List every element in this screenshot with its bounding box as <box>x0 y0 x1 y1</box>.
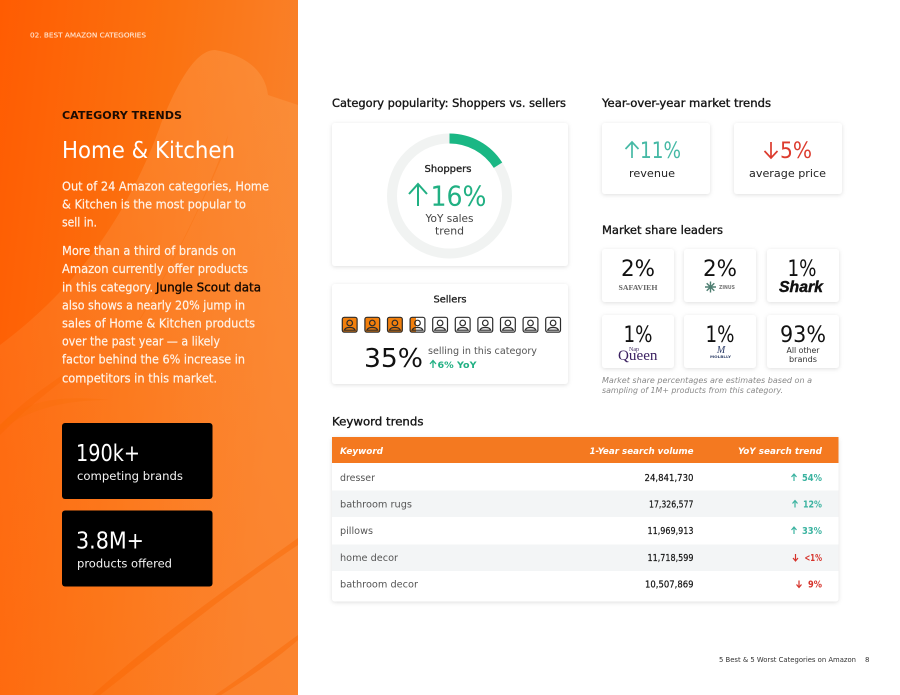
card: Zinus: ZINUS <box>719 285 735 291</box>
footnote: Market share percentages are estimates based on a <box>602 376 812 385</box>
card: all other brands <box>767 315 839 368</box>
text block: analysis: More than a third of brands on <box>62 244 236 258</box>
icon row: sellers pictogram <box>342 317 560 332</box>
row: bathroom rugs: 12% <box>803 500 822 510</box>
card: Molblly: 1% <box>706 323 734 348</box>
panel: orange sidebar <box>0 0 298 695</box>
card: Molblly <box>684 315 756 368</box>
panel: sellers: selling in this category <box>428 346 537 357</box>
stat card: competing brands: 190k+ <box>76 441 140 467</box>
text block: intro <box>62 180 269 230</box>
card: Safavieh: 2% <box>621 257 655 282</box>
stat card: products offered: products offered <box>77 556 172 570</box>
row: dresser: dresser <box>340 473 376 484</box>
icon: up arrow <box>409 184 427 206</box>
row: bathroom decor: 9% <box>808 580 822 590</box>
card: Zinus: 2% <box>703 257 737 282</box>
card: Molblly: M <box>716 345 726 356</box>
card: Nap Queen: Queen <box>618 348 658 364</box>
heading: market share: Market share leaders <box>602 223 723 237</box>
card: revenue: 11% <box>640 139 681 164</box>
card: Safavieh: SAFAVIEH <box>618 283 658 292</box>
icon: small up arrow <box>430 360 436 368</box>
text block: analysis <box>62 244 261 386</box>
heading: keyword trends: Keyword trends <box>332 414 424 428</box>
text block: analysis: Jungle Scout data <box>155 280 261 294</box>
panel: sellers: Sellers <box>434 294 467 306</box>
card: Zinus <box>684 249 756 302</box>
table: keyword trends <box>332 437 838 602</box>
row: home decor: home decor <box>340 553 399 564</box>
row: bathroom decor <box>340 580 822 590</box>
card: revenue <box>602 123 710 194</box>
row: home decor <box>340 553 822 564</box>
panel: shoppers donut <box>332 123 568 266</box>
card: Shark: 1% <box>788 257 816 282</box>
text block: analysis: over the past year — a likely <box>62 334 220 348</box>
title: Home & Kitchen <box>62 138 235 164</box>
stat card: products offered <box>62 510 212 586</box>
card: Safavieh <box>602 249 674 302</box>
text block: analysis: competitors in this market. <box>62 372 217 386</box>
eyebrow heading: CATEGORY TRENDS <box>62 110 182 122</box>
text block: analysis: sales of Home & Kitchen products <box>62 316 255 330</box>
table header: YoY search trend <box>738 447 823 457</box>
row: home decor: <1% <box>804 553 822 564</box>
footer: 5 Best & 5 Worst Categories on Amazon <box>719 656 856 664</box>
text block: intro: & Kitchen is the most popular to <box>62 198 246 212</box>
panel: sellers: 6% YoY <box>438 361 477 371</box>
panel: sellers: 35% <box>364 344 423 374</box>
heading: category popularity: Category popularity: Shoppers vs. sellers <box>332 96 566 110</box>
card: Nap Queen: 1% <box>624 323 652 348</box>
text block: analysis: also shows a nearly 20% jump in <box>62 298 245 312</box>
table header <box>332 437 838 463</box>
card: all other brands: All other <box>786 346 820 355</box>
icon: zinus logo <box>705 282 716 292</box>
card: Shark: Shark <box>779 279 824 296</box>
table header: 1-Year search volume <box>590 447 694 457</box>
card: Molblly: MOLBLLY <box>710 354 731 359</box>
section label: 02. BEST AMAZON CATEGORIES <box>30 32 147 40</box>
row: bathroom decor: bathroom decor <box>340 580 419 590</box>
text block: analysis: factor behind the 6% increase in <box>62 352 245 366</box>
card: all other brands: 93% <box>780 323 826 348</box>
heading: year-over-year: Year-over-year market trends <box>601 96 771 110</box>
text block: analysis: in this category. <box>62 280 153 294</box>
row: dresser: 54% <box>802 473 822 484</box>
row: dresser: 24,841,730 <box>644 473 694 484</box>
row: bathroom rugs <box>340 500 822 510</box>
row: pillows: pillows <box>340 526 373 537</box>
row: home decor: 11,718,599 <box>648 553 694 564</box>
card: average price <box>734 123 842 194</box>
row: pillows: 11,969,913 <box>648 526 694 537</box>
stat card: products offered: 3.8M+ <box>76 528 144 554</box>
donut chart <box>392 138 507 254</box>
panel: shoppers donut: trend <box>435 226 464 238</box>
stat card: competing brands: competing brands <box>77 469 183 483</box>
row: dresser <box>340 473 822 484</box>
row: pillows: 33% <box>802 526 822 537</box>
panel: sellers <box>332 284 568 384</box>
panel: shoppers donut: 16% <box>430 180 486 212</box>
footnote <box>602 376 812 395</box>
table header: Keyword <box>340 447 384 457</box>
card: Shark <box>767 249 839 302</box>
text block: analysis: Amazon currently offer products <box>62 262 248 276</box>
row: bathroom decor: 10,507,869 <box>645 580 694 590</box>
footnote: sampling of 1M+ products from this category. <box>602 386 783 395</box>
card: all other brands: brands <box>789 355 817 364</box>
card: revenue: revenue <box>629 167 675 180</box>
card: Nap Queen <box>602 315 674 368</box>
stat card: competing brands <box>62 423 212 499</box>
footer: 8 <box>865 656 869 664</box>
row: bathroom rugs: 17,326,577 <box>649 500 694 510</box>
text block: intro: Out of 24 Amazon categories, Home <box>62 180 269 194</box>
card: Nap Queen: Nap <box>629 347 639 353</box>
text block: intro: sell in. <box>62 216 97 230</box>
card: average price: 5% <box>780 139 812 164</box>
panel: shoppers donut: YoY sales <box>424 213 474 225</box>
card: average price: average price <box>749 167 826 180</box>
panel: shoppers donut: Shoppers <box>424 164 472 175</box>
row: pillows <box>340 526 822 537</box>
row: bathroom rugs: bathroom rugs <box>340 500 412 510</box>
